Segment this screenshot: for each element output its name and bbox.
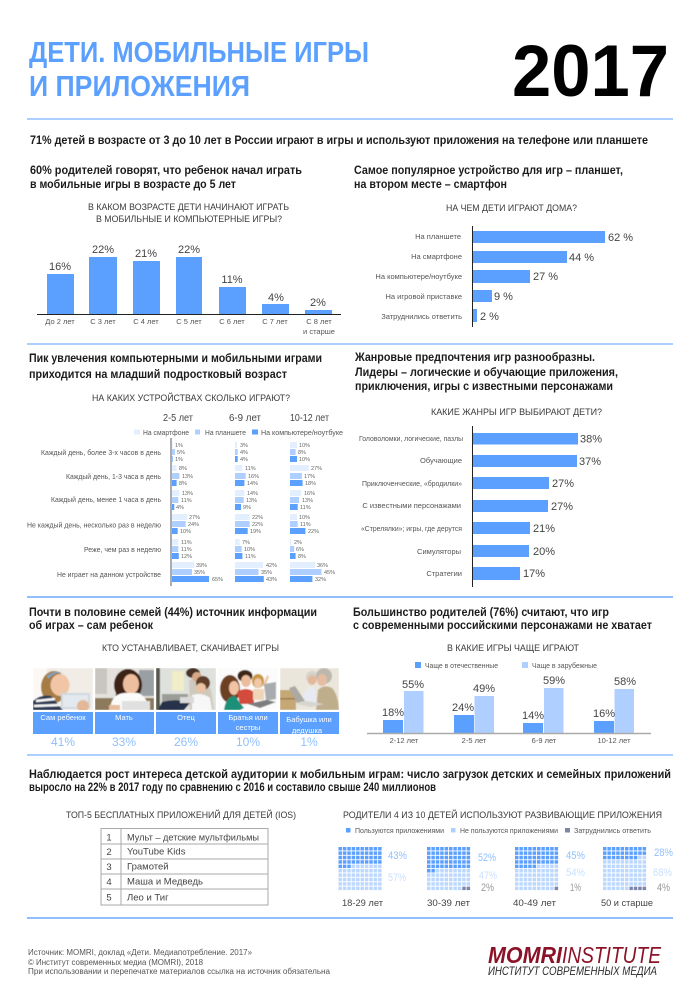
bar chart: start age: 2% <box>310 297 326 309</box>
row: more than 3 hours: 4% <box>240 457 248 463</box>
legend: devices: На смартфоне <box>143 428 189 437</box>
table: top-5 apps: 3 <box>106 862 112 873</box>
grouped bar chart: domestic vs foreign: 2-5 лет <box>462 736 487 745</box>
row: does not play: 32% <box>315 577 326 583</box>
chart title: developmental apps: РОДИТЕЛИ 4 ИЗ 10 ДЕТЕЙ ИСПОЛЬЗУЮТ РАЗВИВАЮЩИЕ ПРИЛОЖЕНИЯ <box>343 809 662 821</box>
heading: device usage <box>29 353 322 381</box>
label boxes: Сам ребенок <box>40 713 86 722</box>
percentages: 1% <box>300 735 318 749</box>
percentages: 10% <box>236 735 260 749</box>
bar chart: genres: 37% <box>579 456 601 468</box>
bar chart: genres: Обучающие <box>420 456 462 465</box>
heading: who installs: Почти в половине семей (44%) источник информации <box>29 607 317 619</box>
row: more than 3 hours: Каждый день, более 3-х часов в день <box>41 448 161 457</box>
bar chart: genres: 17% <box>523 568 545 580</box>
row: does not play: 45% <box>324 570 335 576</box>
panel: developmental apps <box>338 809 673 909</box>
bar chart: devices at home: 2 % <box>480 311 499 323</box>
waffle: 30-39: 47% <box>479 870 497 882</box>
row: more than 3 hours: 1% <box>175 443 183 449</box>
row: less than weekly: Реже, чем раз в неделю <box>84 545 161 554</box>
percentages: 26% <box>174 735 198 749</box>
table: top-5 apps: 2 <box>106 847 112 858</box>
waffle: 40-49: 45% <box>566 850 585 862</box>
row: less than 1 hour: Каждый день, менее 1 часа в день <box>51 495 161 504</box>
row: several times a week: 19% <box>250 529 261 535</box>
bar chart: genres: 21% <box>533 523 555 535</box>
chart title: device usage: НА КАКИХ УСТРОЙСТВАХ СКОЛЬКО ИГРАЮТ? <box>92 392 290 404</box>
row: less than weekly: 12% <box>181 554 192 560</box>
bar chart: start age: До 2 лет <box>45 317 75 326</box>
chart title: domestic vs foreign: В КАКИЕ ИГРЫ ЧАЩЕ ИГРАЮТ <box>447 643 579 654</box>
bar chart: start age: С 5 лет <box>176 317 202 326</box>
panel: device usage by age <box>27 353 343 586</box>
bar chart: genres: Симуляторы <box>417 547 461 556</box>
photo: child <box>33 668 93 710</box>
table: top-5 apps: Маша и Медведь <box>127 876 203 888</box>
row: does not play: 42% <box>266 563 277 569</box>
year: 2017 <box>512 31 669 112</box>
table: top-5 apps: 1 <box>106 832 112 844</box>
table: top-5 apps: YouTube Kids <box>127 846 186 858</box>
row: less than 1 hour: 14% <box>247 491 258 497</box>
chart title: top-5 apps: ТОП-5 БЕСПЛАТНЫХ ПРИЛОЖЕНИЙ ДЛЯ ДЕТЕЙ (IOS) <box>66 809 296 821</box>
grouped bar chart: domestic vs foreign: 6-9 лет <box>532 736 557 745</box>
row: several times a week: 22% <box>308 529 319 535</box>
bar chart: genres: 27% <box>552 478 574 490</box>
heading: download growth: Наблюдается рост интереса детской аудитории к мобильным играм: число загрузок детских и семейных приложений <box>29 769 671 781</box>
grouped bar chart: domestic vs foreign: 24% <box>452 702 474 714</box>
row: less than 1 hour: 13% <box>182 491 193 497</box>
bar chart: devices at home: 9 % <box>494 291 513 303</box>
grouped bar chart: domestic vs foreign <box>367 675 651 745</box>
row: more than 3 hours: 5% <box>177 450 185 456</box>
row: does not play <box>57 562 335 583</box>
row: does not play: 35% <box>194 570 205 576</box>
photo: siblings <box>219 669 277 710</box>
chart title: devices at home: НА ЧЕМ ДЕТИ ИГРАЮТ ДОМА? <box>446 203 577 214</box>
chart title: start age: В МОБИЛЬНЫЕ И КОМПЬЮТЕРНЫЕ ИГРЫ? <box>96 214 282 225</box>
heading: devices at home <box>354 165 623 191</box>
row: several times a week <box>27 514 319 535</box>
row: less than 1 hour: 13% <box>302 498 313 504</box>
age headers: 2-5 лет <box>163 413 193 424</box>
row: 1-3 hours: 14% <box>247 481 258 487</box>
panel: who installs <box>29 607 339 749</box>
row: several times a week: 24% <box>188 522 199 528</box>
row: less than weekly <box>84 539 306 560</box>
row: less than weekly: 11% <box>181 547 192 553</box>
label boxes: Мать <box>115 713 133 722</box>
row: several times a week: 22% <box>252 515 263 521</box>
row: several times a week: Не каждый день, несколько раз в неделю <box>27 520 161 530</box>
chart title: who installs: КТО УСТАНАВЛИВАЕТ, СКАЧИВАЕТ ИГРЫ <box>102 643 279 654</box>
row: less than weekly: 11% <box>245 554 256 560</box>
label boxes <box>33 712 339 735</box>
bar chart: genres: С известными персонажами <box>362 501 461 510</box>
bar chart: genres: «Стрелялки»; игры, где дерутся <box>361 524 462 533</box>
bar chart: genres: 27% <box>551 501 573 513</box>
row: does not play: 36% <box>317 563 328 569</box>
logo: ИНСТИТУТ СОВРЕМЕННЫХ МЕДИА <box>488 964 657 978</box>
legend: app use: Затруднились ответить <box>574 826 651 835</box>
age headers: 10-12 лет <box>290 413 329 424</box>
row: less than 1 hour: 13% <box>246 498 257 504</box>
photo: father <box>156 668 216 710</box>
source note: Источник: MOMRI, доклад «Дети. Медиапотребление. 2017» <box>28 948 253 957</box>
bar chart: genres: 38% <box>580 434 602 446</box>
grouped bar chart: domestic vs foreign: 59% <box>543 675 565 687</box>
chart title: genres: КАКИЕ ЖАНРЫ ИГР ВЫБИРАЮТ ДЕТИ? <box>431 407 602 418</box>
row: less than weekly: 10% <box>244 547 255 553</box>
row: does not play: 39% <box>196 563 207 569</box>
heading: device usage: приходится на младший подростковый возраст <box>29 369 287 381</box>
row: does not play: Не играет на данном устройстве <box>57 570 161 579</box>
row: 1-3 hours: 8% <box>179 481 187 487</box>
bar chart: start age: С 4 лет <box>133 317 159 326</box>
panel: top-5 apps <box>66 809 296 905</box>
row: 1-3 hours: 17% <box>304 474 315 480</box>
bar chart: start age: 22% <box>92 244 114 256</box>
row: less than weekly: 7% <box>242 540 250 546</box>
heading: start age: в мобильные игры в возрасте до 5 лет <box>30 179 236 191</box>
bar chart: genres: Стратегии <box>426 569 462 578</box>
row: more than 3 hours: 8% <box>298 450 306 456</box>
row: less than 1 hour: 11% <box>300 505 311 511</box>
bar chart: start age: 22% <box>178 244 200 256</box>
row: 1-3 hours: Каждый день, 1-3 часа в день <box>66 472 161 481</box>
grouped bar chart: device usage <box>27 438 335 586</box>
grouped bar chart: domestic vs foreign: 16% <box>593 708 615 720</box>
legend: domestic vs foreign: Чаще в отечественные <box>425 661 498 670</box>
heading: genres: приключения, игры с известными персонажами <box>355 381 613 393</box>
bar chart: genres: Головоломки, логические, пазлы <box>359 434 463 443</box>
percentages: 41% <box>51 735 75 749</box>
row: less than 1 hour: 4% <box>176 505 184 511</box>
heading: domestic vs foreign: Большинство родителей (76%) считают, что игр <box>353 607 609 619</box>
waffle: 30-39: 52% <box>478 852 496 864</box>
row: more than 3 hours: 4% <box>240 450 248 456</box>
row: 1-3 hours: 18% <box>305 481 316 487</box>
label boxes: сестры <box>236 723 260 732</box>
table: top-5 apps: Лео и Тиг <box>127 892 169 904</box>
panel: devices at home <box>354 165 633 327</box>
bar chart: genres <box>359 426 602 587</box>
bar chart: genres: Приключенческие, «бродилки» <box>362 479 462 488</box>
label boxes: дедушка <box>292 726 323 735</box>
age headers: 6-9 лет <box>229 413 261 424</box>
table: top-5 apps: 5 <box>106 892 112 904</box>
logo: INSTITUTE <box>562 942 662 968</box>
heading: genres: Лидеры – логические и обучающие приложения, <box>355 367 618 379</box>
logo: MOMRI <box>488 942 563 968</box>
row: more than 3 hours: 10% <box>299 457 310 463</box>
heading: start age <box>30 165 302 191</box>
percentages <box>51 735 318 749</box>
row: more than 3 hours: 10% <box>299 443 310 449</box>
bar chart: start age: 4% <box>268 292 284 304</box>
bar chart: devices at home: 62 % <box>608 232 633 244</box>
panel: genres <box>354 352 618 587</box>
bar chart: start age: 11% <box>221 274 243 286</box>
bar chart: devices at home: На планшете <box>415 232 461 241</box>
heading: device usage: Пик увлечения компьютерными и мобильными играми <box>29 353 322 365</box>
grouped bar chart: domestic vs foreign: 58% <box>614 676 636 688</box>
heading: download growth: выросло на 22% в 2017 году по сравнению с 2016 и составило свыше 240 миллионов <box>29 782 436 794</box>
lead text: 71% детей в возрасте от 3 до 10 лет в России играют в игры и используют приложения на телефоне или планшете <box>30 135 648 147</box>
row: several times a week: 22% <box>252 522 263 528</box>
source note: © Институт современных медиа (MOMRI), 2018 <box>28 958 204 967</box>
row: 1-3 hours: 11% <box>245 466 256 472</box>
row: 1-3 hours: 16% <box>248 474 259 480</box>
heading: who installs: об играх – сам ребенок <box>29 620 153 632</box>
table: top-5 apps: Мульт – детские мультфильмы <box>127 832 259 844</box>
heading: devices at home: Самое популярное устройство для игр – планшет, <box>354 165 623 177</box>
waffle: 18-29 <box>338 847 407 909</box>
title: ДЕТИ. МОБИЛЬНЫЕ ИГРЫ <box>29 37 369 69</box>
heading: who installs <box>29 607 317 632</box>
waffle: 40-49 <box>513 847 585 909</box>
legend: domestic vs foreign <box>415 661 597 670</box>
row: 1-3 hours: 8% <box>179 466 187 472</box>
bar chart: start age: 16% <box>49 261 71 273</box>
waffle: 50+: 4% <box>657 882 670 894</box>
source note: При использовании и перепечатке материалов ссылка на источник обязательна <box>28 967 331 976</box>
legend: devices: На компьютере/ноутбуке <box>261 428 343 437</box>
waffle: 40-49: 1% <box>570 882 581 894</box>
legend: app use <box>346 826 651 835</box>
waffle: 18-29: 18-29 лет <box>342 898 384 909</box>
source note <box>28 948 331 976</box>
row: less than weekly: 2% <box>294 540 302 546</box>
heading: download growth <box>29 769 671 794</box>
bar chart: start age <box>37 244 341 336</box>
waffle: 50+: 50 и старше <box>601 898 653 909</box>
heading: domestic vs foreign: с современными российскими персонажами не хватает <box>353 620 652 632</box>
grouped bar chart: domestic vs foreign: 14% <box>522 710 544 722</box>
bar chart: devices at home: На компьютере/ноутбуке <box>375 272 462 281</box>
legend: devices <box>134 428 343 437</box>
table: top-5 apps: Грамотей <box>127 862 169 872</box>
row: several times a week: 10% <box>180 529 191 535</box>
bar chart: genres: 20% <box>533 546 555 558</box>
row: more than 3 hours: 3% <box>240 443 248 449</box>
grouped bar chart: domestic vs foreign: 2-12 лет <box>390 736 419 745</box>
row: less than 1 hour: 9% <box>243 505 251 511</box>
bar chart: start age: С 8 лет <box>306 317 332 326</box>
table: top-5 apps <box>101 828 268 905</box>
age headers <box>163 413 329 424</box>
heading: start age: 60% родителей говорят, что ребенок начал играть <box>30 165 302 177</box>
grouped bar chart: domestic vs foreign: 49% <box>473 683 495 695</box>
chart title: start age <box>88 202 289 225</box>
row: less than weekly: 8% <box>298 554 306 560</box>
bar chart: start age: С 3 лет <box>90 317 116 326</box>
bar chart: devices at home: На игровой приставке <box>386 292 462 301</box>
bar chart: start age: С 6 лет <box>219 317 245 326</box>
heading: domestic vs foreign <box>353 607 652 632</box>
panel: start age <box>30 165 341 336</box>
legend: app use: Пользуются приложениями <box>355 826 444 835</box>
bar chart: start age: и старше <box>303 327 335 336</box>
row: 1-3 hours <box>66 465 322 487</box>
bar chart: devices at home: 27 % <box>533 271 558 283</box>
bar chart: devices at home: 44 % <box>569 252 594 264</box>
legend: domestic vs foreign: Чаще в зарубежные <box>532 661 597 670</box>
row: 1-3 hours: 27% <box>311 466 322 472</box>
label boxes: Бабушка или <box>286 715 332 724</box>
grouped bar chart: domestic vs foreign: 55% <box>402 679 424 691</box>
percentages: 33% <box>112 735 136 749</box>
row: less than 1 hour: 16% <box>304 491 315 497</box>
row: does not play: 43% <box>266 577 277 583</box>
bar chart: devices at home: На смартфоне <box>411 252 462 261</box>
row: several times a week: 27% <box>189 515 200 521</box>
title: И ПРИЛОЖЕНИЯ <box>29 71 250 103</box>
heading: genres: Жанровые предпочтения игр разнообразны. <box>354 352 595 364</box>
waffle: 50+: 68% <box>653 867 672 879</box>
row: more than 3 hours <box>41 442 310 463</box>
bar chart: devices at home <box>375 226 633 327</box>
waffle: 40-49: 54% <box>566 867 585 879</box>
waffle: 30-39 <box>427 847 497 909</box>
waffle: 40-49: 40-49 лет <box>513 898 557 909</box>
grouped bar chart: domestic vs foreign: 18% <box>382 707 404 719</box>
logo <box>488 942 662 978</box>
photo: mother <box>95 668 154 710</box>
row: less than 1 hour <box>51 490 315 511</box>
row: more than 3 hours: 1% <box>175 457 183 463</box>
row: less than weekly: 11% <box>181 540 192 546</box>
row: several times a week: 10% <box>299 515 310 521</box>
row: 1-3 hours: 13% <box>182 474 193 480</box>
label boxes: Отец <box>177 713 196 722</box>
legend: app use: Не пользуются приложениями <box>460 826 558 835</box>
row: less than 1 hour: 11% <box>181 498 192 504</box>
waffle: 50+ <box>601 847 673 909</box>
row: less than weekly: 6% <box>296 547 304 553</box>
waffle: 18-29: 43% <box>388 850 407 862</box>
bar chart: start age: 21% <box>135 248 157 260</box>
row: does not play: 65% <box>212 577 223 583</box>
waffle: 30-39: 2% <box>481 882 494 894</box>
label boxes: Братья или <box>228 713 268 722</box>
table: top-5 apps: 4 <box>106 877 112 888</box>
photo: grandparents <box>280 668 339 710</box>
grouped bar chart: domestic vs foreign: 10-12 лет <box>598 736 631 745</box>
row: several times a week: 11% <box>300 522 311 528</box>
legend: devices: На планшете <box>205 428 246 437</box>
row: does not play: 35% <box>261 570 272 576</box>
bar chart: devices at home: Затруднились ответить <box>381 312 462 321</box>
bar chart: start age: С 7 лет <box>262 317 288 326</box>
title <box>29 37 369 103</box>
waffle: 18-29: 57% <box>388 872 406 884</box>
panel: domestic vs foreign <box>353 607 652 745</box>
chart title: start age: В КАКОМ ВОЗРАСТЕ ДЕТИ НАЧИНАЮТ ИГРАТЬ <box>88 202 289 213</box>
waffle: 30-39: 30-39 лет <box>427 898 471 909</box>
heading: devices at home: на втором месте – смартфон <box>354 179 507 191</box>
waffle: 50+: 28% <box>654 847 673 859</box>
heading: genres <box>354 352 618 393</box>
